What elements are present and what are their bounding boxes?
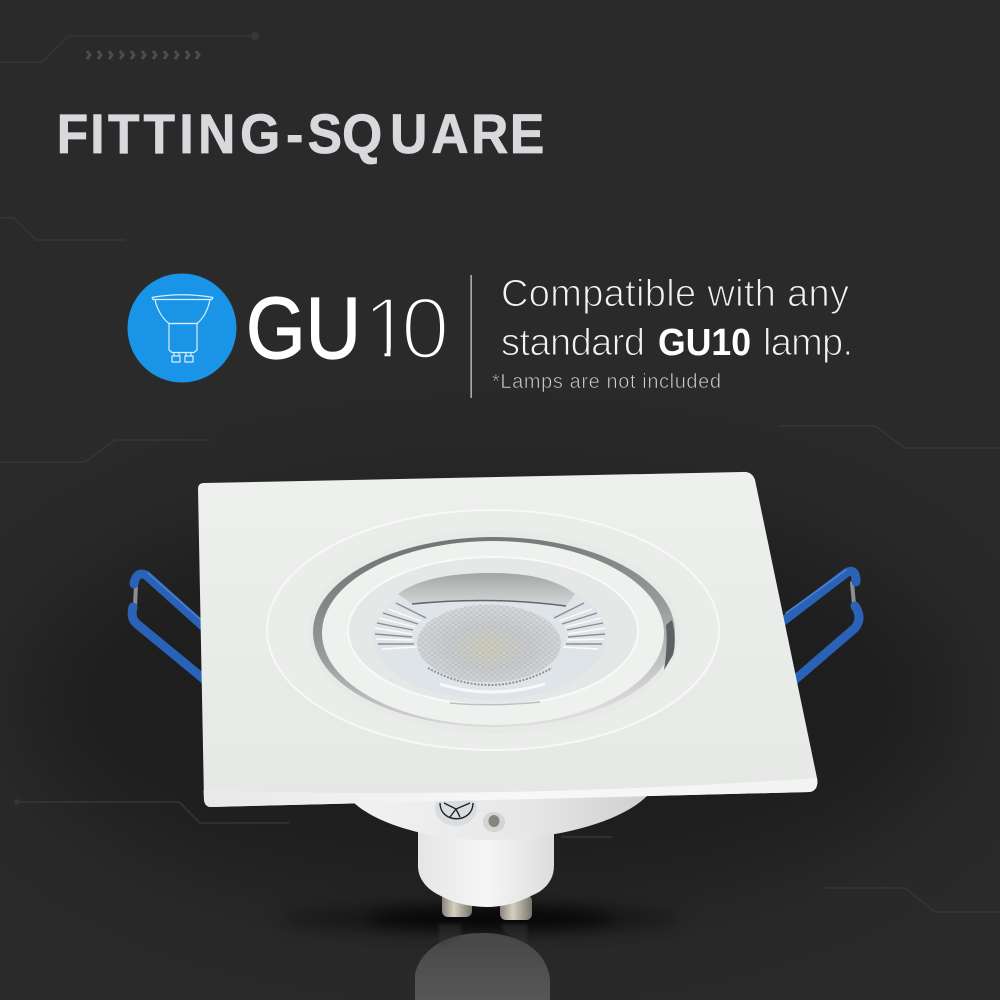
rear dome (351, 790, 648, 840)
compatibility text: lamp. (763, 322, 853, 364)
lens outer (348, 557, 638, 705)
compatibility text (492, 273, 853, 393)
background vignette (20, 490, 960, 910)
compatibility text: GU10 (658, 322, 751, 364)
spring clip: right (778, 570, 859, 684)
reflector streaks (375, 603, 605, 649)
outer ring (267, 510, 719, 750)
GU10 label: 0 (401, 280, 449, 377)
GU10 label (246, 280, 449, 377)
GU10 label: 1 (363, 280, 411, 377)
floor shadow (280, 910, 680, 928)
spring clip: left (132, 573, 205, 680)
pins (442, 893, 532, 920)
square plate (198, 472, 817, 807)
GU10 socket (418, 828, 554, 907)
compatibility text: standard (501, 322, 645, 364)
inner lens dome (417, 604, 561, 692)
socket reflection (415, 924, 550, 1000)
recess gap (313, 537, 675, 727)
icon: GU10 bulb badge (128, 274, 236, 382)
compatibility text: Compatible with any (501, 273, 849, 315)
GU10 label: GU (246, 280, 361, 377)
divider (470, 275, 472, 398)
inner gimbal ring (322, 541, 664, 725)
plate front edge (204, 778, 817, 807)
compatibility text: *Lamps are not included (492, 371, 721, 393)
title: FITTING-SQUARE (57, 103, 544, 165)
chevron row (87, 51, 199, 59)
reflector (373, 573, 607, 700)
